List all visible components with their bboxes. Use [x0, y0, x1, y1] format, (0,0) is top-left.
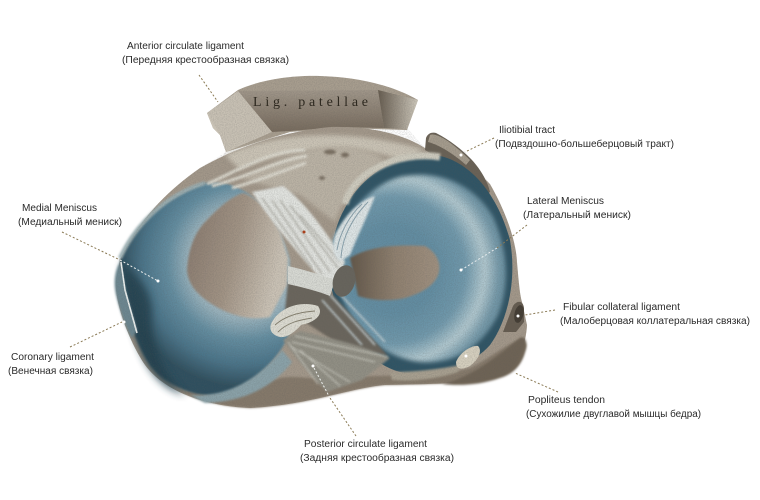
anterior horn fibres medial	[207, 150, 307, 188]
label: fibular collateral ligament: Fibular collateral ligament	[563, 302, 680, 313]
label: popliteus tendon: (Сухожилие двуглавой мышцы бедра)	[526, 408, 701, 420]
knee illustration	[100, 70, 535, 415]
central dark notch	[285, 282, 388, 356]
lateral tibial plateau	[350, 246, 439, 300]
label: posterior circulate ligament	[300, 439, 454, 464]
label: coronary ligament	[8, 352, 94, 377]
leader lines	[62, 75, 558, 436]
medial tibial plateau	[187, 193, 288, 318]
bone pits	[319, 150, 349, 180]
label: fibular collateral ligament	[560, 302, 750, 327]
bone surface between menisci	[240, 146, 385, 222]
shadow band below patellar ligament	[225, 135, 425, 170]
lateral posterior fibres	[322, 292, 385, 345]
marker dots	[122, 154, 520, 368]
pale anterior horn arc	[345, 156, 440, 204]
fibular collateral ligament stump	[503, 302, 525, 332]
anterior cruciate ligament	[252, 186, 345, 288]
label: popliteus tendon	[526, 395, 701, 420]
ligament stump	[288, 263, 359, 299]
label: iliotibial tract	[495, 125, 674, 150]
popliteus tendon bulge	[442, 337, 526, 385]
label: medial meniscus: (Медиальный мениск)	[18, 217, 122, 228]
label: lateral meniscus	[523, 196, 631, 221]
label: anterior circulate ligament	[122, 41, 289, 66]
label: posterior circulate ligament: Posterior circulate ligament	[304, 439, 427, 450]
label: medial meniscus: Medial Meniscus	[22, 203, 97, 214]
label: lateral meniscus: (Латеральный мениск)	[523, 210, 631, 221]
label: anterior circulate ligament: (Передняя крестообразная связка)	[122, 54, 289, 66]
patellar ligament	[207, 76, 418, 152]
grain overlay	[100, 70, 535, 415]
Lig. patellae lettering: Lig. patellae	[253, 95, 368, 110]
label: posterior circulate ligament: (Задняя крестообразная связка)	[300, 452, 454, 464]
label: popliteus tendon: Popliteus tendon	[528, 395, 605, 406]
label: anterior circulate ligament: Anterior circulate ligament	[127, 41, 244, 52]
label: coronary ligament: (Венечная связка)	[8, 366, 93, 377]
label: medial meniscus	[18, 203, 122, 228]
iliotibial tract	[425, 133, 490, 195]
popliteus tendon oval	[390, 346, 480, 381]
label: fibular collateral ligament: (Малоберцовая коллатеральная связка)	[560, 315, 750, 327]
lateral anterior horn fan	[333, 196, 375, 262]
tibial plateau base	[116, 127, 527, 408]
posterior ligament fan	[283, 331, 390, 392]
posterior bone rim	[175, 338, 526, 408]
posterior cruciate curl	[270, 304, 320, 337]
lateral meniscus	[331, 155, 512, 374]
coronary ligament	[115, 262, 137, 338]
label: iliotibial tract: (Подвздошно-большеберцовый тракт)	[495, 138, 674, 150]
label: coronary ligament: Coronary ligament	[11, 352, 94, 363]
label: iliotibial tract: Iliotibial tract	[499, 125, 555, 136]
medial meniscus	[120, 182, 292, 403]
label: lateral meniscus: Lateral Meniscus	[527, 196, 604, 207]
